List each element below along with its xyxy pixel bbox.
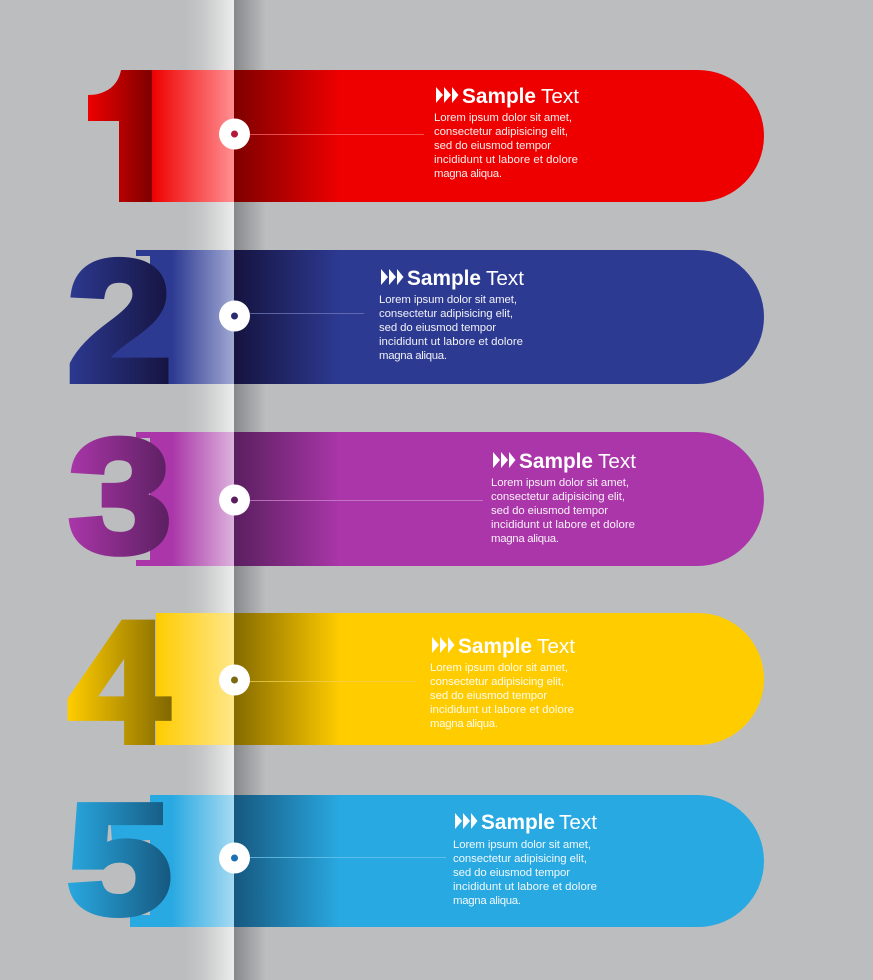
- number 3: 3: [69, 406, 172, 586]
- banner 5 right part: [234, 795, 764, 927]
- body text 5: consectetur adipisicing elit,: [453, 853, 587, 865]
- heading 5: Sample: [481, 811, 555, 834]
- body text 1: incididunt ut labore et dolore: [434, 154, 578, 166]
- panel: step 4 yellow: [68, 586, 764, 779]
- body text 3: Lorem ipsum dolor sit amet,: [491, 477, 629, 489]
- heading 1: Text: [541, 86, 579, 108]
- number 1: 1: [82, 36, 184, 241]
- banner 1 right part: [234, 70, 764, 202]
- marker 4: [219, 664, 250, 696]
- marker 2: [219, 300, 250, 332]
- arrows icon 4: [432, 637, 454, 653]
- text block 4: [430, 635, 575, 730]
- banner 4 right part: [234, 613, 764, 745]
- heading 3: Sample: [519, 450, 593, 473]
- text block 5: [453, 811, 597, 907]
- banner 2 right part: [234, 250, 764, 384]
- arrows icon 1: [436, 87, 458, 103]
- connector line 4: [250, 681, 416, 682]
- body text 3: magna aliqua.: [491, 533, 559, 545]
- heading 4: Text: [537, 636, 575, 658]
- text block 1: [434, 85, 579, 180]
- body text 4: consectetur adipisicing elit,: [430, 676, 564, 688]
- arrows icon 5: [455, 813, 478, 829]
- body text 1: sed do eiusmod tempor: [434, 140, 551, 152]
- body text 4: sed do eiusmod tempor: [430, 690, 547, 702]
- banner 3 left part: [136, 432, 234, 566]
- body text 4: Lorem ipsum dolor sit amet,: [430, 662, 568, 674]
- heading 4: Sample: [458, 635, 532, 658]
- banner 3 right part: [234, 432, 764, 566]
- banner 1 left part: [152, 70, 234, 202]
- arrows icon 3: [493, 452, 516, 468]
- marker 1: [219, 118, 250, 150]
- body text 5: Lorem ipsum dolor sit amet,: [453, 839, 591, 851]
- body text 3: consectetur adipisicing elit,: [491, 491, 625, 503]
- body text 2: magna aliqua.: [379, 350, 447, 362]
- number 2: 2: [67, 225, 172, 418]
- number 5: 5: [67, 772, 172, 946]
- body text 3: sed do eiusmod tempor: [491, 505, 608, 517]
- body text 2: Lorem ipsum dolor sit amet,: [379, 294, 517, 306]
- text block 3: [491, 450, 636, 545]
- body text 5: sed do eiusmod tempor: [453, 867, 570, 879]
- body text 2: incididunt ut labore et dolore: [379, 336, 523, 348]
- page fold highlight: [185, 0, 234, 980]
- marker 5: [219, 842, 250, 874]
- body text 2: sed do eiusmod tempor: [379, 322, 496, 334]
- banner 2 left part: [100, 250, 234, 384]
- body text 2: consectetur adipisicing elit,: [379, 308, 513, 320]
- body text 1: magna aliqua.: [434, 168, 502, 180]
- heading 3: Text: [598, 451, 636, 473]
- number 1: [88, 70, 152, 202]
- body text 5: magna aliqua.: [453, 895, 521, 907]
- banner 4 left part: [156, 613, 234, 745]
- page fold shadow: [234, 0, 266, 980]
- heading 5: Text: [559, 812, 597, 834]
- arrows icon 2: [381, 269, 404, 285]
- heading 2: Text: [486, 268, 524, 290]
- connector line 2: [250, 313, 364, 314]
- text block 2: [379, 267, 524, 362]
- body text 1: Lorem ipsum dolor sit amet,: [434, 112, 572, 124]
- body text 1: consectetur adipisicing elit,: [434, 126, 568, 138]
- heading 1: Sample: [462, 85, 536, 108]
- body text 3: incididunt ut labore et dolore: [491, 519, 635, 531]
- body text 5: incididunt ut labore et dolore: [453, 881, 597, 893]
- body text 4: incididunt ut labore et dolore: [430, 704, 574, 716]
- panel: step 1 red: [88, 70, 764, 202]
- connector line 3: [250, 500, 483, 501]
- panel: step 3 purple: [69, 406, 764, 586]
- marker 3: [219, 484, 250, 516]
- number 4: 4: [68, 586, 169, 779]
- banner 5 left part: [110, 795, 234, 927]
- connector line 5: [250, 857, 446, 858]
- body text 4: magna aliqua.: [430, 718, 498, 730]
- panel: step 2 blue: [67, 225, 764, 418]
- connector line 1: [250, 134, 424, 135]
- panel: step 5 cyan: [67, 772, 764, 946]
- heading 2: Sample: [407, 267, 481, 290]
